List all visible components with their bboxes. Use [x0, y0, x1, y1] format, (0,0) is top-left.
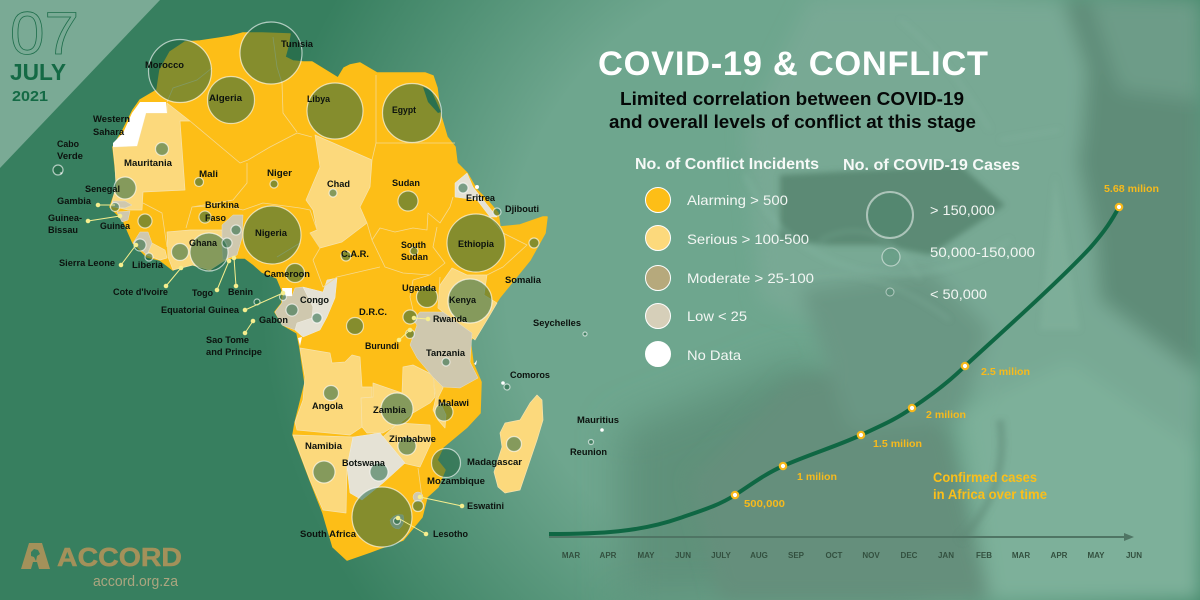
country labels: Algeria	[209, 93, 243, 104]
country labels: Sudan	[401, 252, 428, 263]
country labels: Comoros	[510, 370, 550, 381]
legend: conflict incidents: Moderate > 25-100	[687, 270, 814, 286]
chart caption: in Africa over time	[933, 487, 1047, 502]
country labels: Morocco	[145, 60, 184, 71]
country labels: Reunion	[570, 447, 607, 458]
subtitle: and overall levels of conflict at this stage	[609, 112, 976, 132]
country labels: Niger	[267, 168, 292, 179]
country labels: Benin	[228, 287, 253, 298]
month labels: NOV	[862, 551, 880, 560]
month labels: DEC	[901, 551, 918, 560]
country labels: Sudan	[392, 178, 420, 189]
line chart: confirmed cases in Africa over time	[549, 183, 1159, 560]
country labels: Bissau	[48, 225, 78, 236]
countries: serious level	[111, 103, 543, 513]
chart caption	[933, 470, 1047, 502]
country labels: Mozambique	[427, 476, 485, 487]
month labels: MAY	[1087, 551, 1105, 560]
callout leader lines	[86, 203, 464, 536]
logo: ACCORD: accord.org.za	[93, 574, 179, 590]
country labels: Senegal	[85, 184, 120, 195]
country labels: Sahara	[93, 127, 125, 138]
country labels: Djibouti	[505, 204, 539, 215]
covid-19 case bubbles	[53, 22, 594, 547]
country labels: Faso	[205, 213, 226, 224]
month labels: MAR	[1012, 551, 1030, 560]
background photo: health worker in protective gear	[620, 0, 1200, 600]
country labels: Malawi	[438, 398, 469, 409]
country labels: Madagascar	[467, 457, 522, 468]
country labels: Guinea-	[48, 213, 82, 224]
map of Africa: conflict levels	[48, 22, 619, 560]
logo: ACCORD: ACCORD	[57, 542, 182, 572]
countries: pale low level	[295, 173, 497, 500]
country labels: Gabon	[259, 315, 288, 326]
legend: conflict incidents: Low < 25	[687, 308, 747, 324]
country labels: Kenya	[449, 295, 477, 306]
country labels: Uganda	[402, 283, 437, 294]
month labels	[562, 551, 1142, 560]
country labels: Cote d'Ivoire	[113, 287, 168, 298]
cases curve	[549, 207, 1119, 534]
month labels: FEB	[976, 551, 992, 560]
date: year: 2021	[12, 88, 48, 105]
month labels: SEP	[788, 551, 805, 560]
country labels: Lesotho	[433, 529, 468, 540]
curve milestone labels: 1 milion	[797, 471, 837, 483]
date corner panel	[0, 0, 160, 168]
legend: conflict incidents: Serious > 100-500	[687, 231, 809, 247]
country labels	[48, 39, 619, 540]
country labels: Angola	[312, 401, 344, 412]
countries: no data	[60, 102, 604, 432]
country labels: and Principe	[206, 347, 262, 358]
country labels: Rwanda	[433, 314, 468, 325]
title: COVID-19 & CONFLICT	[598, 45, 988, 83]
country labels: C.A.R.	[341, 249, 369, 260]
country labels: Togo	[192, 288, 213, 299]
country labels: Chad	[327, 179, 350, 190]
month labels: JAN	[938, 551, 954, 560]
subtitle	[609, 89, 976, 132]
curve milestone labels: 1.5 milion	[873, 438, 922, 450]
country labels: Burkina	[205, 200, 240, 211]
continent base: alarming level	[110, 33, 547, 560]
country labels: Western	[93, 114, 130, 125]
country labels: Somalia	[505, 275, 542, 286]
curve milestone labels: 500,000	[744, 498, 785, 510]
time axis arrow	[549, 533, 1134, 541]
curve milestone labels	[744, 183, 1159, 510]
legend heading: conflict incidents: No. of Conflict Incidents	[635, 156, 819, 173]
country labels: Egypt	[392, 105, 417, 116]
country labels: Liberia	[132, 260, 164, 271]
legend: conflict incidents: Alarming > 500	[687, 192, 788, 208]
country labels: Namibia	[305, 441, 343, 452]
country labels: Libya	[307, 94, 331, 105]
legend: conflict incidents	[635, 156, 819, 366]
country labels: Ghana	[189, 238, 218, 249]
legend: covid-19 cases: > 150,000	[930, 202, 995, 218]
country labels: Nigeria	[255, 228, 288, 239]
country labels: South Africa	[300, 529, 357, 540]
country labels: Tanzania	[426, 348, 466, 359]
country labels: Congo	[300, 295, 329, 306]
logo: ACCORD	[21, 542, 182, 590]
month labels: AUG	[750, 551, 768, 560]
month labels: JUN	[1126, 551, 1142, 560]
legend: covid-19 cases: 50,000-150,000	[930, 244, 1035, 260]
country labels: Tunisia	[281, 39, 314, 50]
country labels: Equatorial Guinea	[161, 305, 240, 316]
country labels: South	[401, 240, 426, 251]
curve milestone markers	[732, 204, 1122, 498]
country labels: Gambia	[57, 196, 92, 207]
curve milestone labels: 5.68 milion	[1104, 183, 1159, 195]
country labels: Ethiopia	[458, 239, 495, 250]
legend: covid-19 cases	[843, 157, 1035, 302]
date: month: JULY	[10, 59, 66, 85]
month labels: APR	[600, 551, 617, 560]
month labels: OCT	[826, 551, 843, 560]
country labels: Eritrea	[466, 193, 496, 204]
country borders	[143, 37, 527, 497]
chart caption: Confirmed cases	[933, 470, 1037, 485]
month labels: JULY	[711, 551, 732, 560]
legend heading: covid-19 cases: No. of COVID-19 Cases	[843, 157, 1020, 174]
month labels: MAY	[637, 551, 655, 560]
country labels: Cabo	[57, 139, 79, 150]
country labels: Verde	[57, 151, 83, 162]
country labels: D.R.C.	[359, 307, 387, 318]
country labels: Mauritius	[577, 415, 619, 426]
country labels: Eswatini	[467, 501, 504, 512]
country labels: Sierra Leone	[59, 258, 115, 269]
legend: conflict incidents: No Data	[687, 347, 741, 363]
country labels: Burundi	[365, 341, 399, 352]
curve milestone labels: 2 milion	[926, 409, 966, 421]
legend: covid-19 cases: < 50,000	[930, 286, 987, 302]
country labels: Guinea	[100, 221, 131, 232]
country labels: Cameroon	[264, 269, 310, 280]
country labels: Mali	[199, 169, 218, 180]
country labels: Sao Tome	[206, 335, 249, 346]
red sea sliver	[423, 87, 441, 113]
month labels: JUN	[675, 551, 691, 560]
country labels: Mauritania	[124, 158, 173, 169]
country labels: Seychelles	[533, 318, 581, 329]
date: day number: 07	[10, 0, 79, 67]
month labels: MAR	[562, 551, 580, 560]
curve milestone labels: 2.5 milion	[981, 366, 1030, 378]
subtitle: Limited correlation between COVID-19	[620, 89, 964, 109]
countries: low level	[113, 201, 478, 529]
month labels: APR	[1051, 551, 1068, 560]
country labels: Botswana	[342, 458, 386, 469]
country labels: Zambia	[373, 405, 407, 416]
country labels: Zimbabwe	[389, 434, 436, 445]
